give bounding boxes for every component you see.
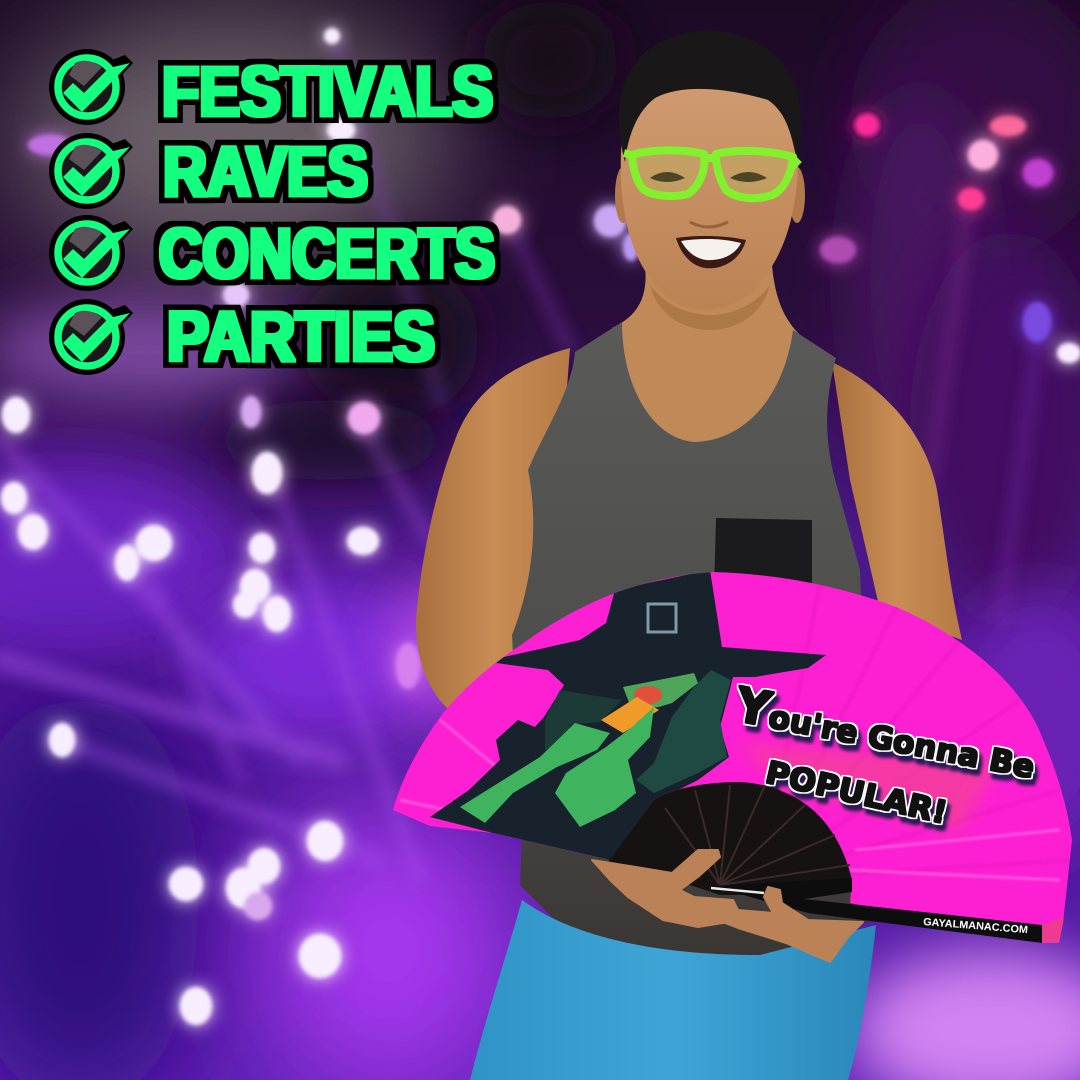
check icon: raves (49, 133, 133, 209)
head (615, 31, 805, 310)
hand: viewer right (725, 887, 863, 962)
witch hair left (545, 690, 622, 750)
popsicle (601, 697, 659, 733)
fan leaf: pink (393, 572, 1072, 943)
person (416, 31, 962, 1080)
glasses lenses (632, 150, 793, 198)
neck and chest (612, 265, 800, 445)
lips (634, 686, 662, 704)
witch silhouette: hat, cape and dress (430, 570, 826, 860)
neck shadow (650, 285, 770, 330)
label: concerts: CONCERTS (159, 215, 495, 294)
fan leaf: fold shading and artwork (400, 570, 1072, 950)
check icon: festivals (49, 49, 133, 125)
witch face (623, 673, 698, 710)
face (621, 88, 798, 310)
glasses bridge (624, 153, 799, 165)
eyes (650, 172, 767, 182)
fan slogan (730, 677, 1041, 831)
hand fan (393, 570, 1072, 950)
hand: viewer left (592, 850, 738, 927)
witch hair (636, 670, 731, 793)
label: raves: RAVES (163, 133, 368, 212)
check icon: concerts (49, 215, 133, 291)
handle highlight (711, 888, 764, 893)
fan corner (1042, 917, 1064, 943)
checklist (49, 49, 495, 377)
smile (676, 236, 746, 268)
shorts (470, 900, 876, 1080)
witch arm (460, 723, 610, 823)
fan slogan: POPULAR! (762, 755, 951, 831)
hands (592, 850, 863, 962)
nose (690, 222, 728, 227)
fan handle (711, 878, 1042, 943)
hair (619, 31, 801, 162)
background: fibre streaks (0, 40, 1040, 880)
check icon: parties (49, 299, 133, 375)
hat buckle (648, 604, 676, 632)
slogan smear (740, 745, 1000, 830)
handle text: GAYALMANAC.COM (923, 916, 1029, 936)
fan highlights (400, 720, 1060, 880)
teeth (681, 239, 741, 260)
fan slogan: You're Gonna Be (730, 677, 1041, 790)
tank top (512, 322, 874, 958)
witch chest (555, 707, 654, 827)
label: parties: PARTIES (167, 298, 435, 377)
fan ribs: separators (665, 785, 850, 885)
arm: viewer left (416, 348, 570, 715)
arm: viewer right (832, 362, 962, 640)
fan folds (794, 587, 1070, 875)
fan ribs: black bamboo (608, 782, 852, 895)
label: festivals: FESTIVALS (162, 53, 493, 132)
tank pocket (714, 518, 812, 590)
ears (615, 167, 631, 223)
